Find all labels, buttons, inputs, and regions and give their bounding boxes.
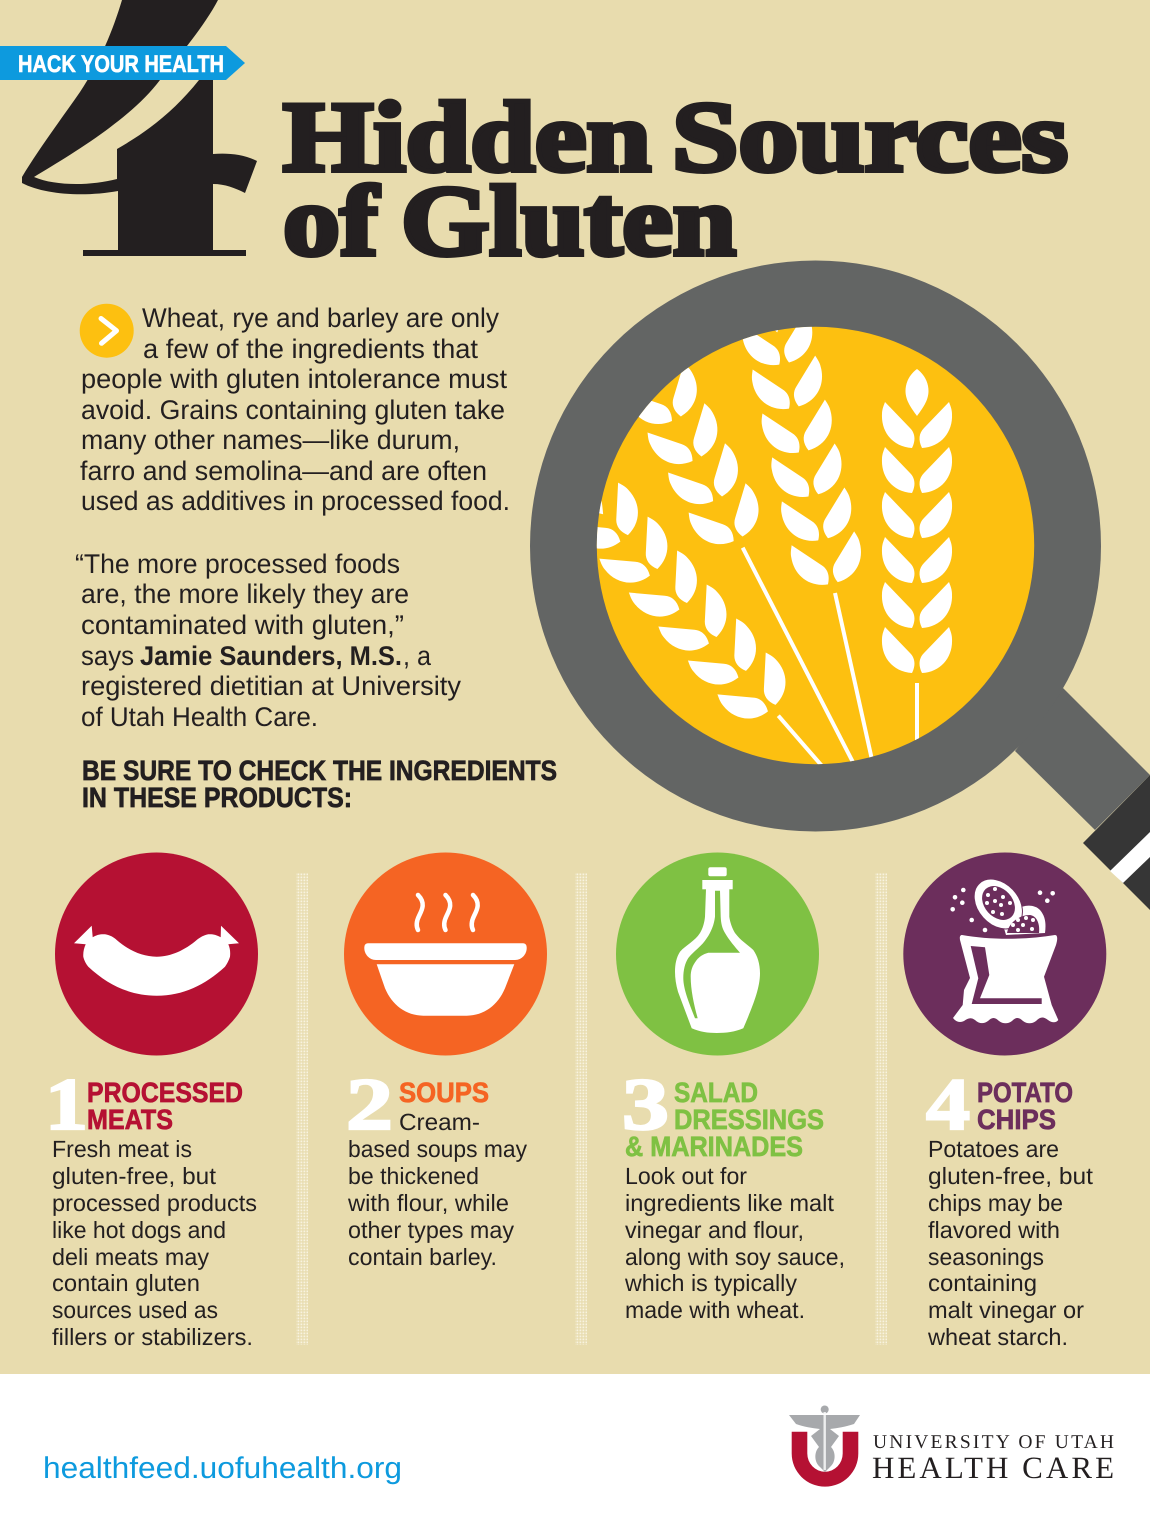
heading: soups: SOUPS xyxy=(399,1077,489,1108)
body text: seasonings xyxy=(928,1244,1044,1270)
body text: sources used as xyxy=(52,1297,218,1323)
quote paragraph: , a xyxy=(403,641,432,671)
intro paragraph: many other names—like durum, xyxy=(81,425,460,455)
title: Gluten xyxy=(401,166,736,276)
intro paragraph: people with gluten intolerance must xyxy=(81,364,507,394)
quote paragraph: contaminated with gluten,” xyxy=(81,610,404,640)
body text: wheat starch. xyxy=(927,1324,1068,1350)
icon: bottle xyxy=(616,852,819,1056)
title xyxy=(283,82,1068,276)
body text: malt vinegar or xyxy=(928,1297,1084,1323)
body text: Fresh meat is xyxy=(52,1136,192,1162)
heading: salad dressings and marinades xyxy=(625,1077,824,1162)
heading: salad dressings and marinades: DRESSINGS xyxy=(674,1104,824,1135)
quote paragraph: “The more processed foods xyxy=(75,549,400,579)
numeral 4: 4 xyxy=(926,1064,970,1146)
banner: hack your health: HACK YOUR HEALTH xyxy=(18,51,224,78)
intro paragraph: farro and semolina—and are often xyxy=(80,456,487,486)
numeral 3: 3 xyxy=(622,1064,669,1146)
subheading: check the ingredients: IN THESE PRODUCTS: xyxy=(82,782,352,813)
big numeral 4 xyxy=(22,0,257,256)
intro paragraph: a few of the ingredients that xyxy=(143,334,478,364)
intro paragraph: Wheat, rye and barley are only xyxy=(142,303,499,333)
quote paragraph: are, the more likely they are xyxy=(81,579,409,609)
body text: ingredients like malt xyxy=(625,1190,834,1216)
body text: containing xyxy=(928,1270,1037,1296)
heading: potato chips: CHIPS xyxy=(977,1104,1056,1135)
heading: processed meats: MEATS xyxy=(87,1104,173,1135)
panel: soups xyxy=(344,852,547,1270)
body text: deli meats may xyxy=(52,1244,209,1270)
quote paragraph: says xyxy=(81,641,134,671)
body text xyxy=(624,1163,845,1323)
body text: gluten-free, but xyxy=(928,1163,1093,1189)
panel: salad dressings and marinades xyxy=(616,852,845,1323)
heading: salad dressings and marinades: & MARINADES xyxy=(625,1131,803,1162)
icon: yellow chevron bullet xyxy=(80,304,134,358)
body text: fillers or stabilizers. xyxy=(52,1324,253,1350)
intro paragraph xyxy=(80,303,510,516)
quote paragraph xyxy=(75,549,462,732)
title: Sources xyxy=(672,82,1068,192)
logo: university of utah health care xyxy=(789,1406,1114,1487)
body text: Potatoes are xyxy=(928,1136,1059,1162)
intro paragraph: avoid. Grains containing gluten take xyxy=(81,395,505,425)
body text: with flour, while xyxy=(347,1190,509,1216)
footer xyxy=(0,1374,1150,1518)
body text: processed products xyxy=(52,1190,257,1216)
heading: salad dressings and marinades: SALAD xyxy=(674,1077,758,1108)
body text xyxy=(927,1136,1093,1350)
body text: gluten-free, but xyxy=(52,1163,216,1189)
heading: processed meats xyxy=(87,1077,243,1135)
body text: like hot dogs and xyxy=(52,1217,226,1243)
body text xyxy=(347,1109,527,1270)
numeral 2: 2 xyxy=(346,1064,393,1146)
wheat illustration in lens xyxy=(596,326,1034,764)
quote paragraph: of Utah Health Care. xyxy=(81,702,318,732)
quote paragraph: Jamie Saunders, M.S. xyxy=(140,641,402,671)
body text: vinegar and flour, xyxy=(625,1217,804,1243)
body text: flavored with xyxy=(928,1217,1060,1243)
body text: be thickened xyxy=(348,1163,479,1189)
subheading: check the ingredients xyxy=(82,755,557,813)
magnifying glass with wheat xyxy=(530,260,1150,910)
website link text: healthfeed.uofuhealth.org xyxy=(43,1452,402,1485)
body text: which is typically xyxy=(624,1270,797,1296)
numeral 1: 1 xyxy=(45,1064,88,1146)
subheading: check the ingredients: BE SURE TO CHECK THE INGREDIENTS xyxy=(82,755,557,786)
quote paragraph: registered dietitian at University xyxy=(81,671,462,701)
body text: Cream- xyxy=(399,1109,480,1135)
intro paragraph: used as additives in processed food. xyxy=(81,486,510,516)
icon: soup bowl xyxy=(344,852,547,1056)
banner: hack your health xyxy=(0,46,245,80)
panel: potato chips xyxy=(903,852,1106,1350)
body text xyxy=(52,1136,257,1350)
icon: sausage xyxy=(55,852,258,1056)
logo: university of utah health care: HEALTH CARE xyxy=(872,1450,1114,1485)
panel: processed meats xyxy=(45,852,258,1350)
logo: university of utah health care: UNIVERSITY OF UTAH xyxy=(873,1432,1114,1453)
title: of xyxy=(283,166,380,276)
heading: potato chips xyxy=(977,1077,1073,1135)
body text: chips may be xyxy=(928,1190,1063,1216)
magnifier ring xyxy=(530,260,1101,832)
body text: contain gluten xyxy=(52,1270,200,1296)
body text: Look out for xyxy=(625,1163,747,1189)
magnifier handle xyxy=(1015,688,1150,910)
icon: chip bag xyxy=(903,852,1106,1056)
body text: along with soy sauce, xyxy=(625,1244,845,1270)
heading: potato chips: POTATO xyxy=(977,1077,1073,1108)
body text: based soups may xyxy=(348,1136,527,1162)
heading: processed meats: PROCESSED xyxy=(87,1077,243,1108)
logo mark xyxy=(789,1406,860,1487)
title: Hidden xyxy=(283,82,651,192)
body text: other types may xyxy=(348,1217,514,1243)
body text: made with wheat. xyxy=(625,1297,805,1323)
body text: contain barley. xyxy=(348,1244,497,1270)
